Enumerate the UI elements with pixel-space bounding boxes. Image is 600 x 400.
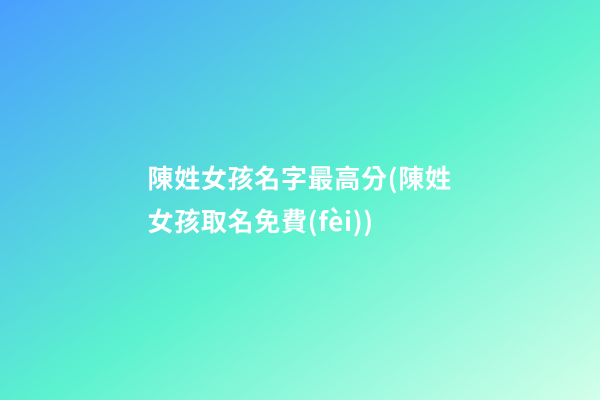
title: 女孩取名免費(fèi)) <box>148 202 374 238</box>
title: 陳姓女孩名字最高分(陳姓 <box>148 158 452 196</box>
title <box>148 158 452 238</box>
